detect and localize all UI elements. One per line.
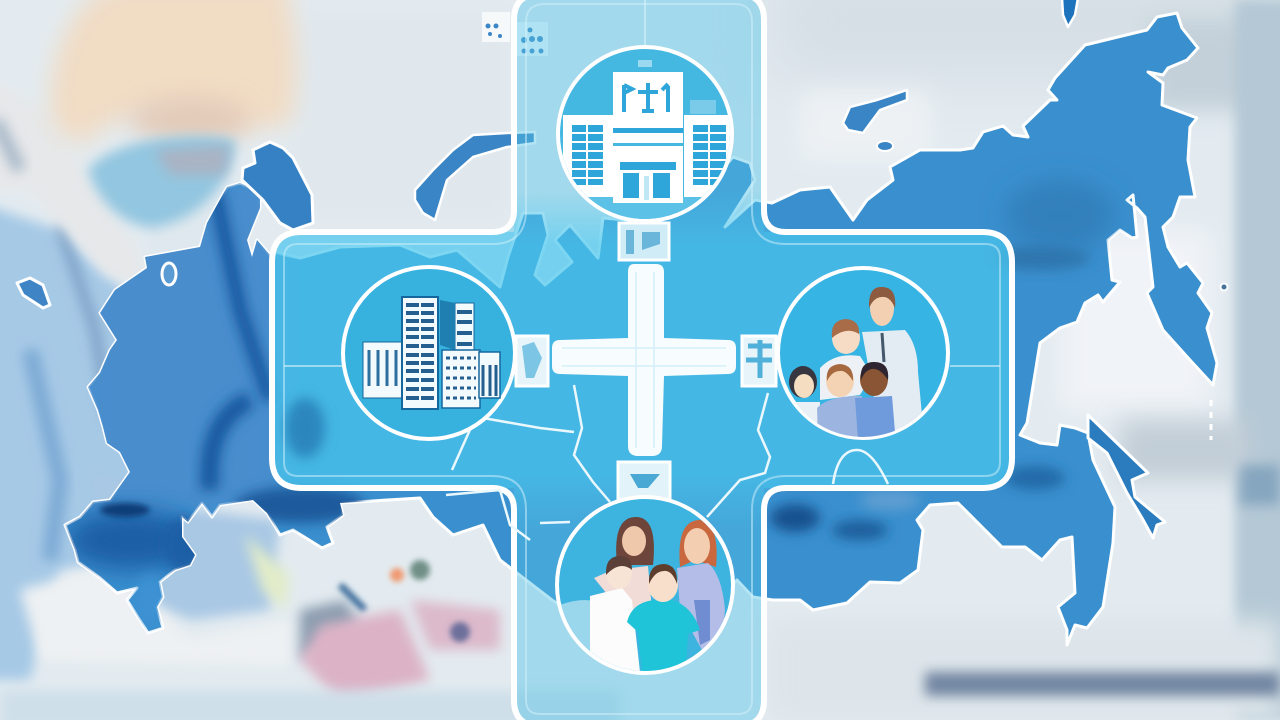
cross: saturated centre fading into vertical arm [514,190,764,530]
circle: hospital building [555,47,735,227]
map: speckled archipelago [482,12,548,56]
hospital: roof detail [638,60,652,67]
map: north-east island [1062,0,1078,27]
connector tile: bottom [618,462,670,500]
hospital: entrance block [613,146,683,203]
map: tonal shading [65,180,1115,625]
cross: stethoscope swirl seen through glass [285,398,325,458]
worker: hair [50,0,297,145]
hospital: central band [613,128,683,133]
connector tile: left [516,336,548,386]
circle: city buildings [343,267,515,439]
map: small arctic islet [877,141,893,151]
cross: inner glass outline [284,4,1000,714]
medical cross panel [272,0,1012,720]
circle: medical staff group [778,268,948,440]
map: Kuril dots [1210,400,1212,440]
family: red-haired woman [679,520,717,567]
map: Baltic exclave [17,278,50,308]
family: mother [616,517,654,565]
connector tile: top [619,223,669,260]
worker: collar [0,70,140,285]
worker: surgical mask [88,136,235,228]
worker: neck [145,185,245,265]
hospital: central tower [613,72,683,128]
worker: face [130,98,250,142]
map: ring island [162,263,176,285]
family: child in white [590,588,640,672]
family: lighter lower lens [561,600,619,667]
hospital: left wing [563,115,613,197]
worker: dark tool [300,600,360,660]
connector tile: right [742,336,776,386]
hospital: ground [588,197,702,219]
map: Severnaya Zemlya [843,90,907,133]
cross: centre and side divider lines [284,0,1000,366]
family: boy in teal shirt [627,600,700,672]
worker: yellow-green item [245,535,290,610]
map: mainland [65,13,1217,650]
staff: tall doctor [862,330,922,430]
cross: white outline [272,0,1012,720]
city: right blocks [442,350,480,408]
staff: middle child [817,396,862,440]
cross: saturated right arm [764,232,1012,488]
worker: pink gloved hand [300,610,430,702]
staff: left child [795,402,820,424]
staff: middle figure [820,355,866,400]
city: left low block [363,342,405,398]
circle: family group [557,497,733,680]
cross: saturated left arm [272,232,514,488]
worker: coloured items [390,568,404,582]
cross: body [272,0,1012,720]
staff: dark-skinned child [855,396,895,440]
worker: coat [0,200,140,680]
map: Kola and lake shape [242,142,313,230]
city: back tower [455,303,474,361]
blurred medical worker [0,0,620,720]
city: central tower [402,297,438,409]
map: small eastern islet [1220,284,1228,290]
worker: gloves and sleeve [20,565,290,665]
central white plus [552,264,736,456]
map: Sakhalin [1088,415,1165,538]
map: Novaya Zemlya [415,132,535,220]
worker: tablet edge [110,662,340,674]
hospital: right wing [684,115,730,197]
cross: river and boundary lines [446,385,888,540]
